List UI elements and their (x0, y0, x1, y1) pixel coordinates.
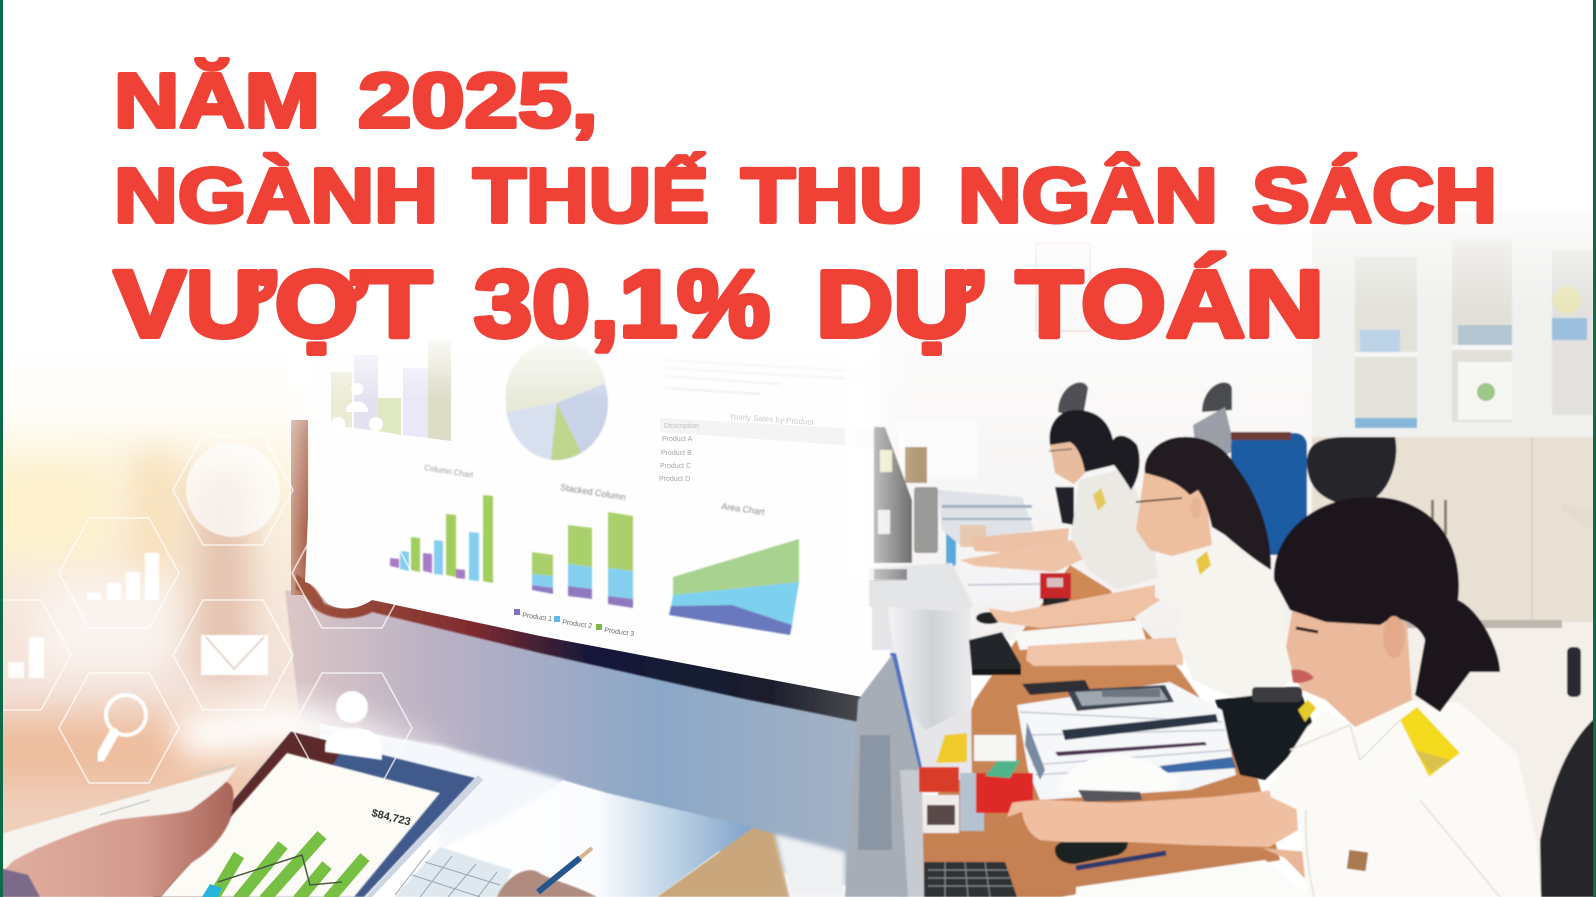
chair arm and dark trousers (1215, 687, 1315, 780)
area chart: Area Chart (721, 501, 766, 517)
top faded bar chart (331, 340, 451, 441)
right green edge (1593, 0, 1596, 897)
side table (1562, 503, 1596, 533)
wall calendar (1036, 243, 1090, 331)
icon: person (325, 691, 382, 760)
monitor left bezel (291, 420, 308, 595)
product table: Product A (662, 436, 693, 443)
window (898, 420, 978, 477)
woman in back (960, 410, 1157, 590)
calculator (1022, 680, 1174, 711)
red stamp (1040, 573, 1071, 607)
tablet value: $84,723 (370, 807, 412, 829)
stacked chart legend: Product 1 (522, 612, 552, 623)
product table: Description (664, 423, 699, 430)
middle keyboard (969, 632, 1021, 675)
title line 1: NĂM (114, 58, 320, 144)
monitor bottom bezel (296, 574, 884, 727)
photo: tax officers at desks (845, 200, 1596, 897)
left green edge (0, 0, 3, 897)
bright desk patch (775, 834, 845, 897)
title line 2: SÁCH (1252, 152, 1497, 239)
product table: Product C (660, 463, 691, 470)
title line 3 (114, 252, 1324, 358)
warm blurred room background (0, 340, 320, 897)
tablet bar chart (212, 835, 365, 897)
white fade between photos (845, 330, 915, 580)
title line 3: TOÁN (1016, 252, 1324, 358)
mouse (976, 612, 1002, 624)
stacked column chart (532, 482, 633, 608)
product table (659, 360, 880, 483)
title line 3: DỰ (816, 252, 983, 358)
product table: Product B (661, 450, 692, 457)
icon: globe (186, 443, 280, 537)
pen (538, 858, 580, 892)
title (114, 58, 1497, 358)
icon: magnifier (100, 695, 146, 758)
wooden desk (657, 828, 790, 897)
title line 2 (114, 152, 1497, 239)
far right chair piece (1567, 647, 1581, 697)
title line 2: THU (741, 153, 923, 239)
stacked column chart: Stacked Column (560, 482, 626, 502)
area chart (669, 501, 799, 635)
keyboard (394, 847, 512, 897)
paper on desk (440, 780, 752, 897)
stacked chart legend: Product 3 (604, 627, 634, 638)
silver monitors (845, 427, 974, 897)
product table: Yearly Sales by Product (729, 412, 815, 427)
title line 1 (114, 58, 598, 144)
sleeve (0, 868, 40, 897)
title line 3: VƯỢT (114, 252, 432, 358)
hand with pen (497, 870, 597, 897)
stacked chart legend: Product 2 (562, 619, 592, 630)
person hand on tablet (0, 782, 233, 897)
front paper (1076, 860, 1311, 897)
long wooden desk (920, 565, 1280, 897)
document lines (35, 765, 235, 850)
pie chart (505, 340, 608, 460)
icon: small bars (8, 637, 44, 678)
title line 3: 30,1% (474, 252, 770, 358)
tablet (153, 732, 483, 897)
title line 1: 2025, (358, 58, 598, 144)
woman in middle (988, 437, 1293, 703)
title line 2: NGÀNH (114, 152, 438, 239)
sheet under hand (1014, 620, 1146, 650)
headrests and chairs (1055, 382, 1596, 897)
stacked chart legend (514, 609, 634, 638)
hexagon icon network (0, 435, 412, 783)
monitor screen (305, 340, 880, 700)
title line 2: NGÂN (958, 152, 1218, 239)
white desk area near tablet (300, 725, 565, 850)
paper stacks back (938, 490, 1040, 602)
icon: envelope (201, 635, 268, 675)
title line 2: THUẾ (473, 152, 709, 239)
monitor stand neck (285, 590, 905, 897)
product table: Product D (659, 476, 690, 483)
front keyboard (924, 862, 1017, 897)
woman in front (1007, 497, 1541, 897)
storage cabinets (1312, 210, 1596, 897)
photo: analytics monitor and tablet (0, 340, 905, 897)
mouse and pen (1055, 832, 1166, 868)
white fade over monitor top (0, 330, 880, 400)
paper stack and binders (1017, 682, 1236, 802)
left document (0, 767, 237, 897)
office wall (880, 200, 1320, 640)
icon: bars (87, 553, 159, 600)
desk glare (170, 700, 460, 760)
column chart: Column Chart (424, 463, 475, 480)
white fade over cabinets (860, 180, 1596, 310)
red boxes and sticky notes (919, 733, 1033, 833)
column chart (390, 463, 493, 583)
